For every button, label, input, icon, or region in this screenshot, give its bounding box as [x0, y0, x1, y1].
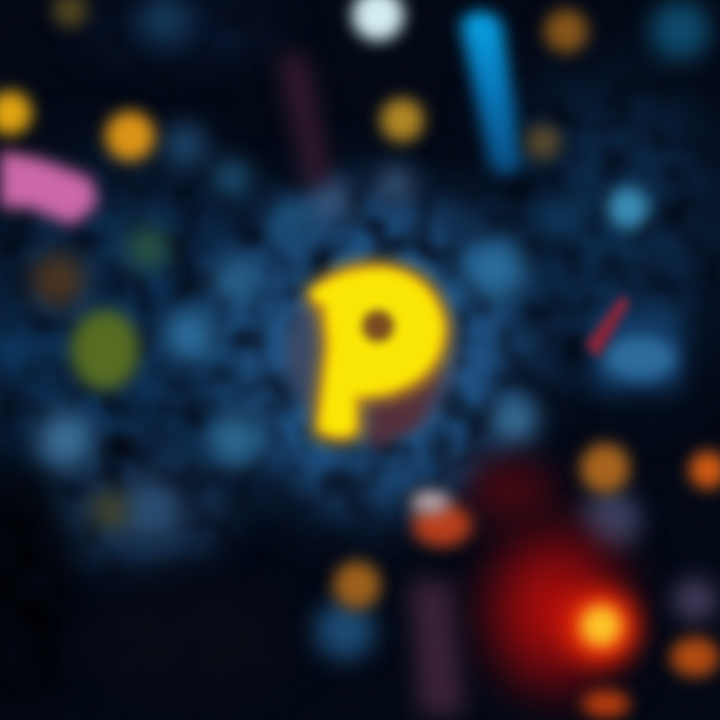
red glow [410, 460, 645, 715]
letter P glow [306, 262, 450, 443]
pink shape [0, 150, 98, 226]
coin lower shadow [368, 365, 445, 450]
top white glow [352, 0, 404, 41]
yellow and orange dots [0, 0, 588, 528]
letter P [312, 270, 442, 435]
yellow P coin [286, 262, 458, 450]
light blue dot [607, 187, 649, 229]
olive circle [71, 310, 139, 390]
chart icon at right [585, 295, 682, 390]
bright blue streak [460, 11, 522, 175]
dim red vertical streak [278, 55, 330, 185]
orange lights [333, 443, 720, 718]
coin disc [286, 266, 458, 438]
